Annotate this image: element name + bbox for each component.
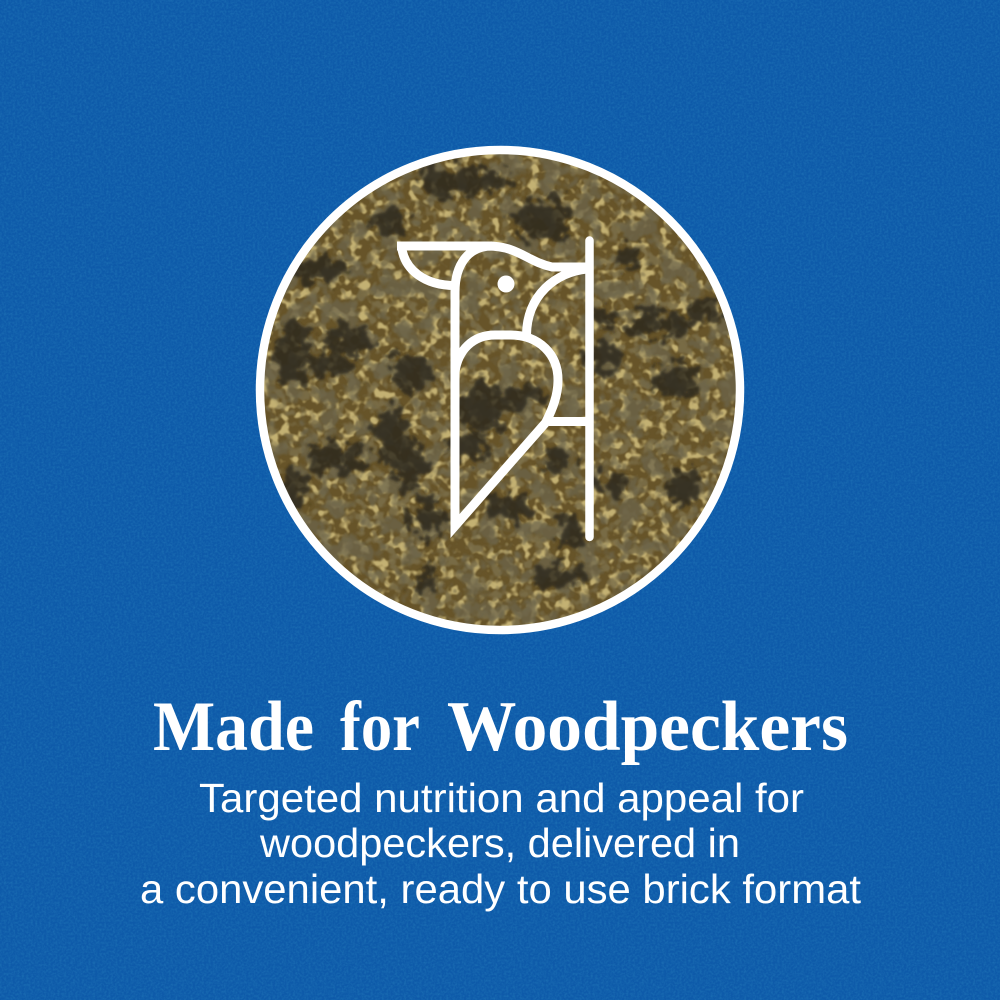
back of head and body with pointed tail bbox=[455, 246, 548, 526]
throat curve bbox=[526, 269, 587, 335]
crest lower curve bbox=[402, 246, 455, 286]
title: Made bbox=[153, 688, 314, 766]
white ring bbox=[260, 150, 740, 630]
description text: Targeted nutrition and appeal for bbox=[199, 775, 804, 821]
wing bbox=[455, 335, 558, 422]
description text bbox=[140, 775, 862, 912]
seed texture circle with white ring bbox=[256, 146, 744, 634]
description text: a convenient, ready to use brick format bbox=[140, 866, 862, 912]
crest and head top bbox=[397, 246, 589, 267]
title: Woodpeckers bbox=[447, 688, 848, 766]
foot bar bbox=[549, 417, 589, 426]
seed photo texture bbox=[256, 146, 744, 634]
icon: woodpecker on a tree trunk bbox=[397, 240, 590, 537]
eye bbox=[498, 276, 514, 292]
trunk line bbox=[585, 240, 594, 537]
title: for bbox=[340, 688, 420, 766]
title bbox=[153, 688, 848, 766]
description text: woodpeckers, delivered in bbox=[259, 820, 740, 866]
